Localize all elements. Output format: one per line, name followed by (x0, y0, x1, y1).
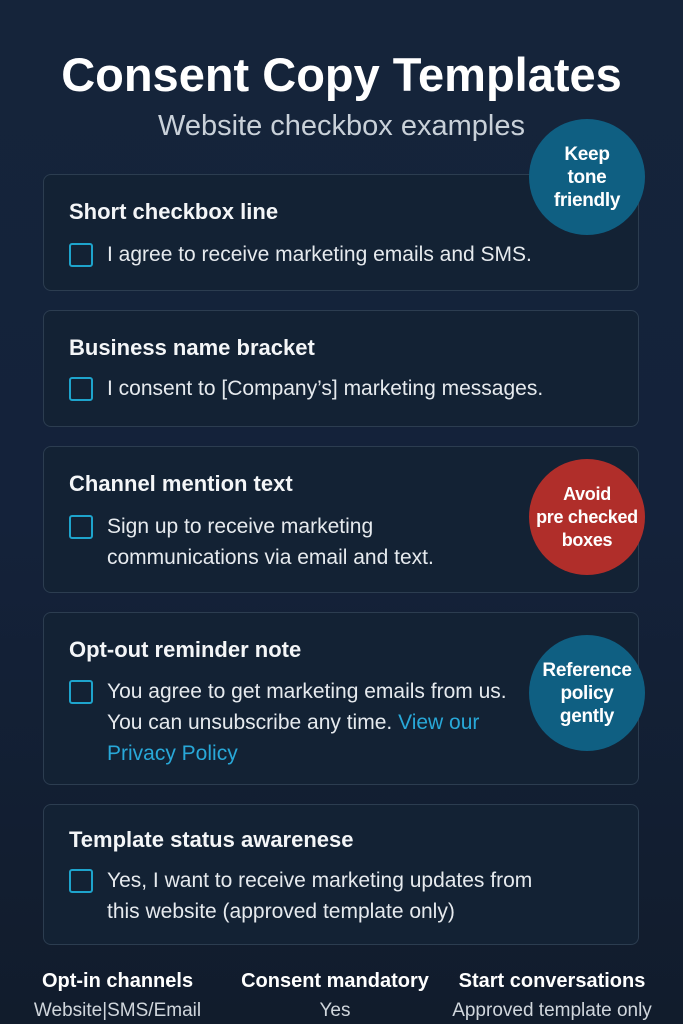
footer: opt-in channels: Opt-in channels (42, 970, 193, 992)
circle: avoid pre checked (529, 459, 645, 575)
footer: consent mandatory: Consent mandatory (241, 970, 429, 992)
circle: avoid pre checked: Avoid (563, 484, 611, 504)
footer: consent mandatory (241, 970, 429, 1021)
circle: avoid pre checked: pre checked (536, 506, 638, 526)
card: opt-out reminder (43, 612, 639, 785)
circle: reference policy (529, 635, 645, 751)
footer: consent mandatory: Yes (320, 1000, 350, 1021)
circle: avoid pre checked: boxes (562, 530, 612, 550)
circle: keep tone friendly: Keep (564, 144, 610, 164)
card: short checkbox line: I agree to receive marketing emails and SMS. (107, 243, 532, 266)
title: Consent Copy Templates (61, 48, 622, 101)
card: short checkbox line: Short checkbox line (69, 199, 278, 224)
circle: reference policy: policy (560, 682, 614, 704)
card: channel mention text (43, 446, 639, 593)
card: channel mention text: Channel mention text (69, 471, 293, 496)
card: template status: Yes, I want to receive marketing updates from (107, 869, 532, 892)
footer: start conversations: Start conversations (459, 970, 645, 992)
circle: reference policy: gently (560, 706, 614, 726)
footer: opt-in channels (34, 970, 201, 1021)
card: template status: this website (approved template only) (107, 900, 455, 923)
card: template status: Template status awarenese (69, 827, 354, 852)
card: business name bracket: I consent to [Company’s] marketing messages. (107, 377, 543, 400)
circle: keep tone friendly: tone (568, 166, 606, 188)
subtitle: Website checkbox examples (158, 110, 525, 142)
footer: start conversations: Approved template only (452, 1000, 652, 1021)
card: opt-out reminder: Privacy Policy (107, 742, 238, 765)
card: business name bracket (43, 310, 639, 427)
footer: opt-in channels: Website|SMS/Email (34, 1000, 201, 1021)
card: short checkbox line (43, 174, 639, 291)
card: business name bracket: Business name bracket (69, 335, 315, 360)
circle: reference policy: Reference (542, 660, 632, 680)
card: opt-out reminder: Opt-out reminder note (69, 637, 301, 662)
card: channel mention text: communications via email and text. (107, 546, 434, 569)
card: template status (43, 804, 639, 945)
card: opt-out reminder: You agree to get marketing emails from us. (107, 680, 507, 703)
card: channel mention text: Sign up to receive marketing (107, 515, 373, 538)
card: opt-out reminder: You can unsubscribe any time. View our (107, 711, 479, 734)
footer: start conversations (452, 970, 652, 1021)
circle: keep tone friendly: friendly (554, 190, 620, 210)
circle: keep tone friendly (529, 119, 645, 235)
